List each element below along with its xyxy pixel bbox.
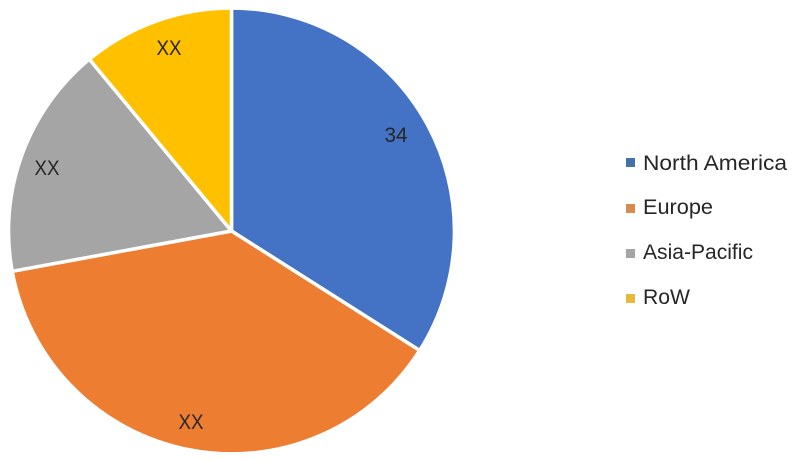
data label: Europe value: XX	[178, 411, 204, 434]
legend item: North America: North America	[643, 152, 787, 175]
slice: Europe	[12, 231, 420, 454]
legend item: Asia-Pacific: Asia-Pacific	[643, 241, 753, 264]
legend	[626, 152, 787, 309]
slice: RoW	[89, 8, 232, 231]
slice: Asia-Pacific	[9, 59, 232, 271]
legend item: RoW: RoW	[643, 286, 690, 309]
data label: Asia-Pacific value: XX	[34, 157, 60, 180]
pie chart	[9, 8, 454, 454]
data label: North America value: 34	[384, 124, 408, 147]
data label: RoW value: XX	[156, 37, 182, 60]
legend item: Europe: Europe	[643, 196, 713, 219]
slice: North America	[232, 8, 454, 350]
